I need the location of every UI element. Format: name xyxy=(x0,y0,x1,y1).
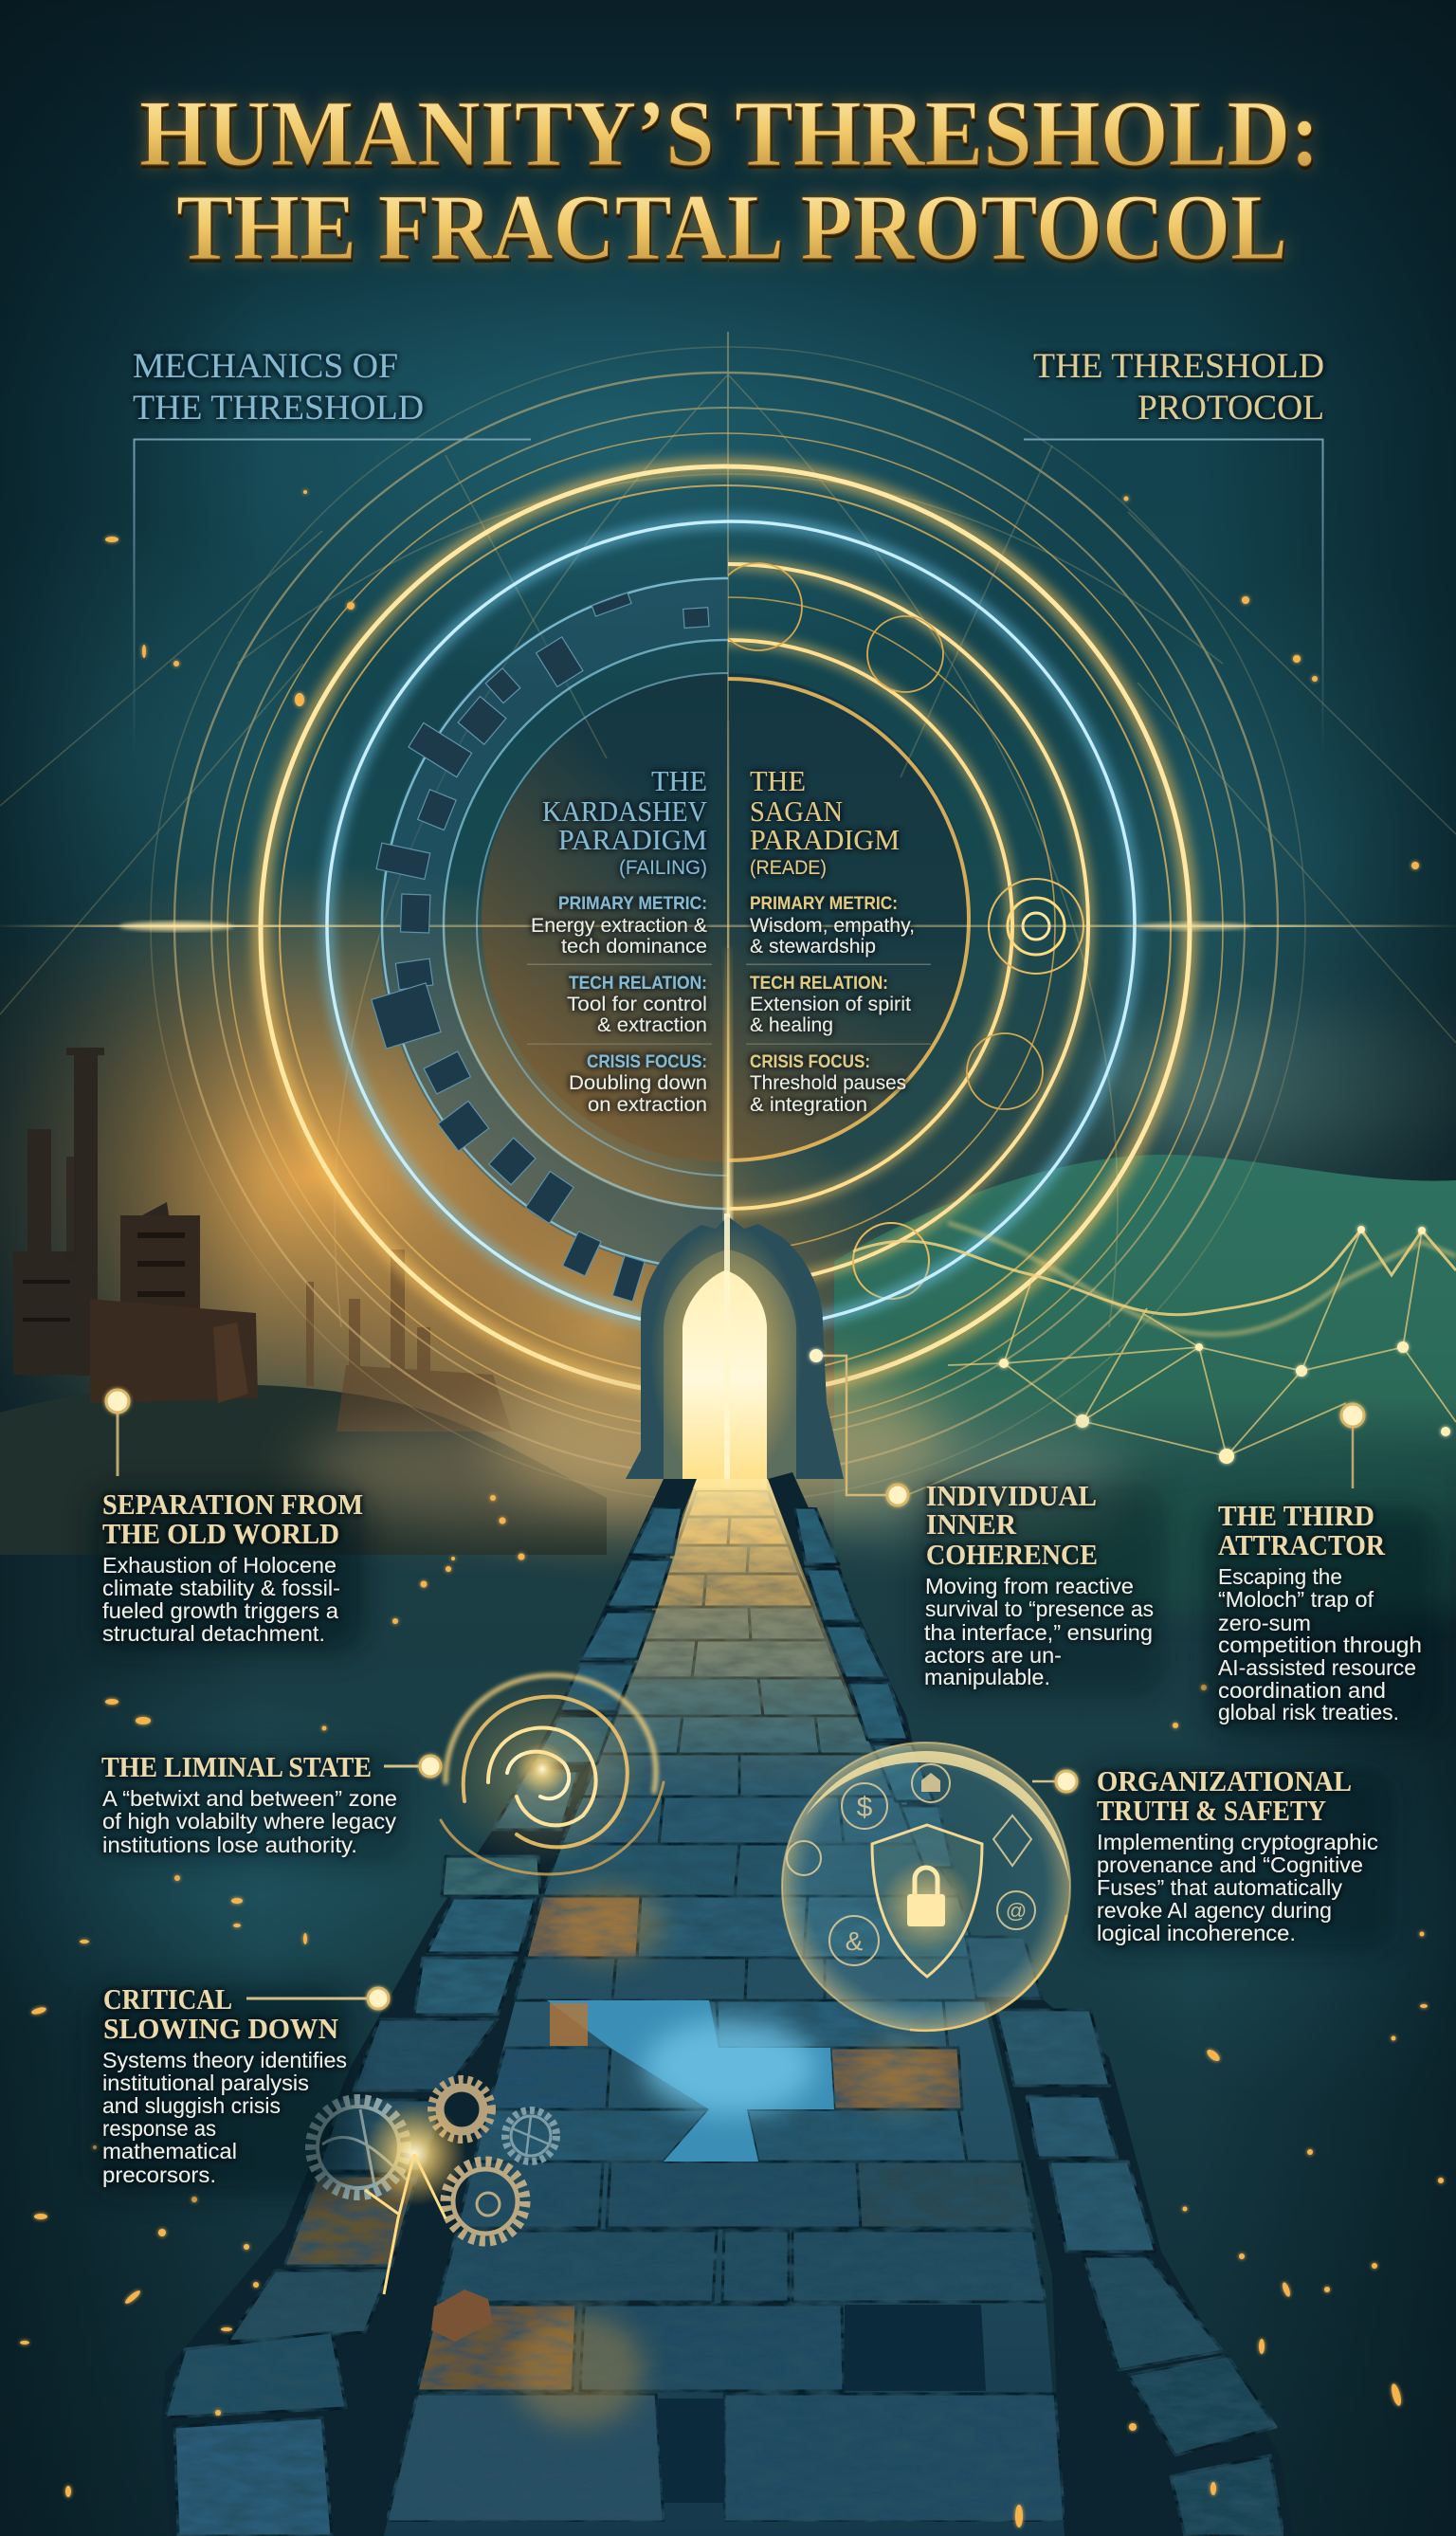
heading: THE THIRD xyxy=(1218,1499,1374,1532)
body text: manipulable. xyxy=(924,1665,1050,1689)
body text: Exhaustion of Holocene xyxy=(102,1553,337,1578)
heading: Sagan paradigm: SAGAN xyxy=(750,794,843,828)
body text: fueled growth triggers a xyxy=(102,1598,338,1623)
body text: Implementing cryptographic xyxy=(1097,1830,1378,1854)
water reflection pools xyxy=(547,2000,986,2503)
body text xyxy=(1097,1830,1378,1945)
right wall base xyxy=(768,1472,1294,2536)
body text: structural detachment. xyxy=(102,1621,325,1646)
row: tech relation: Tool for control xyxy=(567,994,707,1015)
title xyxy=(139,81,1320,280)
callout: critical slowing down xyxy=(90,1982,389,2195)
body text xyxy=(102,2048,347,2187)
marker pin xyxy=(384,1756,441,1777)
row: crisis focus: & integration xyxy=(750,1094,867,1116)
body text: tha interface,” ensuring xyxy=(924,1620,1153,1645)
dark machine band left half xyxy=(379,575,728,1267)
row: crisis focus: on extraction xyxy=(588,1094,707,1116)
icon: shield with padlock xyxy=(872,1825,982,1977)
path floor xyxy=(384,1488,1065,2536)
heading xyxy=(926,1479,1098,1571)
heading: SEPARATION FROM xyxy=(102,1487,363,1521)
callout: separation from the old world xyxy=(90,1390,365,1654)
body text: and sluggish crisis xyxy=(102,2093,281,2118)
row: tech relation xyxy=(567,974,707,1036)
heading xyxy=(102,1487,363,1550)
body text: provenance and “Cognitive xyxy=(1097,1852,1363,1877)
loose brown rock xyxy=(431,2290,493,2342)
right section label: the threshold protocol xyxy=(1033,347,1324,428)
row: primary metric: PRIMARY METRIC: xyxy=(558,894,707,914)
body text: actors are un- xyxy=(924,1643,1062,1668)
body text: revoke AI agency during xyxy=(1097,1898,1332,1923)
body text: institutional paralysis xyxy=(102,2071,309,2095)
body text xyxy=(102,1553,340,1646)
row: primary metric: Wisdom, empathy, xyxy=(750,915,915,937)
callout: the liminal state xyxy=(90,1749,441,1863)
icon: glass security sphere xyxy=(782,1742,1070,2031)
marker pin xyxy=(106,1390,129,1476)
left section label: mechanics of the threshold: MECHANICS OF xyxy=(133,347,398,386)
small data icons: & xyxy=(846,1926,864,1956)
body text: coordination and xyxy=(1218,1678,1386,1703)
heading: Sagan paradigm: (READE) xyxy=(750,857,827,879)
horizontal lens flare xyxy=(0,921,1456,931)
body text: survival to “presence as xyxy=(925,1596,1154,1621)
heading: Kardashev paradigm: THE xyxy=(651,764,707,797)
marker pin xyxy=(1032,1771,1077,1792)
heading: INNER xyxy=(926,1507,1017,1541)
left wall base xyxy=(161,1479,697,2536)
panel: Kardashev paradigm (failing) xyxy=(527,764,712,1116)
floor stones xyxy=(387,1490,1065,2522)
left section label: mechanics of the threshold xyxy=(133,347,424,428)
heading: THE OLD WORLD xyxy=(102,1517,339,1550)
right landscape: green hills xyxy=(834,1155,1456,1612)
left landscape: ruined industrial skyline xyxy=(0,1048,607,1555)
wall stones left xyxy=(165,1507,682,2536)
body text: mathematical xyxy=(102,2139,237,2163)
section frame xyxy=(135,440,1323,758)
marker connector xyxy=(810,1349,908,1505)
heading: COHERENCE xyxy=(926,1538,1098,1571)
body text: competition through xyxy=(1218,1633,1422,1657)
callout: the third attractor xyxy=(1204,1404,1441,1735)
stone causeway xyxy=(161,1472,1294,2536)
row: crisis focus: Doubling down xyxy=(569,1072,707,1094)
body text: Moving from reactive xyxy=(925,1574,1134,1598)
row: primary metric xyxy=(750,894,915,958)
row: primary metric xyxy=(531,894,707,958)
heading xyxy=(103,1982,338,2045)
heading: ORGANIZATIONAL xyxy=(1097,1764,1352,1797)
panel: Sagan paradigm (reade) xyxy=(746,764,931,1116)
row: tech relation: TECH RELATION: xyxy=(569,974,707,994)
body text: Fuses” that automatically xyxy=(1097,1875,1342,1900)
body text: A “betwixt and between” zone xyxy=(102,1786,397,1811)
threshold gate arch xyxy=(626,1213,844,1488)
title: THE FRACTAL PROTOCOL xyxy=(176,174,1287,280)
body text: Systems theory identifies xyxy=(102,2048,347,2072)
body text: precorsors. xyxy=(102,2162,216,2187)
portal rings: concentric gold and blue xyxy=(0,332,1456,1502)
title: HUMANITY’S THRESHOLD: xyxy=(139,81,1320,186)
heading: Kardashev paradigm: (FAILING) xyxy=(619,857,707,879)
row: tech relation xyxy=(750,974,911,1036)
heading: CRITICAL xyxy=(103,1982,232,2016)
heading xyxy=(1218,1499,1386,1561)
row: tech relation: TECH RELATION: xyxy=(750,974,888,994)
bright gold ring xyxy=(228,433,1223,1429)
row: crisis focus: CRISIS FOCUS: xyxy=(587,1052,707,1072)
body text: AI-assisted resource xyxy=(1218,1655,1416,1680)
small data icons xyxy=(787,1764,1035,1965)
heading: Sagan paradigm xyxy=(750,764,900,879)
small data icons: $ xyxy=(857,1792,873,1823)
ring centre disc with paradigm background xyxy=(482,673,971,1162)
body text: zero-sum xyxy=(1218,1611,1311,1635)
body text: Escaping the xyxy=(1218,1564,1342,1589)
body text: logical incoherence. xyxy=(1097,1921,1296,1945)
wall stones right xyxy=(794,1507,1283,2536)
left section label: mechanics of the threshold: THE THRESHOLD xyxy=(133,389,424,428)
bright blue ring xyxy=(327,521,1135,1329)
body text: response as xyxy=(102,2116,216,2141)
thin outer geometry arcs xyxy=(0,332,1456,1502)
row: crisis focus: Threshold pauses xyxy=(750,1072,906,1094)
row: crisis focus xyxy=(750,1052,906,1116)
row: primary metric: tech dominance xyxy=(561,936,707,958)
row: primary metric: & stewardship xyxy=(750,936,876,958)
marker pin xyxy=(246,1988,389,2009)
heading: Kardashev paradigm: KARDASHEV xyxy=(542,794,708,828)
heading: Sagan paradigm: THE xyxy=(750,764,806,797)
marker pin xyxy=(1341,1404,1364,1488)
row: tech relation: & extraction xyxy=(597,1014,707,1036)
callout: organizational truth and safety xyxy=(1032,1764,1393,1953)
row: crisis focus xyxy=(569,1052,707,1116)
callout: individual inner coherence xyxy=(810,1349,1166,1697)
heading: SLOWING DOWN xyxy=(103,2012,338,2045)
body text xyxy=(924,1574,1154,1689)
right section label: the threshold protocol: THE THRESHOLD xyxy=(1033,347,1324,386)
network of golden nodes on right xyxy=(853,1223,1456,1498)
heading: Kardashev paradigm: PARADIGM xyxy=(558,823,707,856)
heading: Sagan paradigm: PARADIGM xyxy=(750,823,900,856)
row: tech relation: & healing xyxy=(750,1014,833,1036)
heading: THE LIMINAL STATE xyxy=(101,1750,372,1783)
vertical light beam xyxy=(724,721,732,1251)
heading: Kardashev paradigm xyxy=(542,764,708,879)
heading: ATTRACTOR xyxy=(1218,1528,1386,1561)
body text: “Moloch” trap of xyxy=(1218,1587,1374,1612)
row: primary metric: PRIMARY METRIC: xyxy=(750,894,898,914)
body text: of high volabilty where legacy xyxy=(102,1809,397,1834)
heading: INDIVIDUAL xyxy=(926,1479,1097,1512)
row: primary metric: Energy extraction & xyxy=(531,915,707,937)
icon: broken gears with spark xyxy=(311,2080,556,2294)
golden light on path xyxy=(512,1479,948,2427)
fog around gate base xyxy=(303,1365,1128,1536)
gold band right half xyxy=(728,551,1101,1300)
body text xyxy=(1218,1564,1422,1724)
heading xyxy=(1097,1764,1352,1827)
row: crisis focus: CRISIS FOCUS: xyxy=(750,1052,870,1072)
body text: institutions lose authority. xyxy=(102,1833,357,1857)
heading: TRUTH & SAFETY xyxy=(1097,1794,1326,1827)
body text: climate stability & fossil- xyxy=(102,1576,340,1600)
right section label: the threshold protocol: PROTOCOL xyxy=(1138,389,1324,428)
row: tech relation: Extension of spirit xyxy=(750,994,911,1015)
floating embers xyxy=(20,490,1444,2527)
body text xyxy=(102,1786,397,1857)
body text: global risk treaties. xyxy=(1218,1700,1399,1724)
icon: liminal energy swirl xyxy=(438,1675,664,1874)
small data icons: @ xyxy=(1006,1899,1027,1923)
machinery fragments on ring xyxy=(372,593,709,1302)
